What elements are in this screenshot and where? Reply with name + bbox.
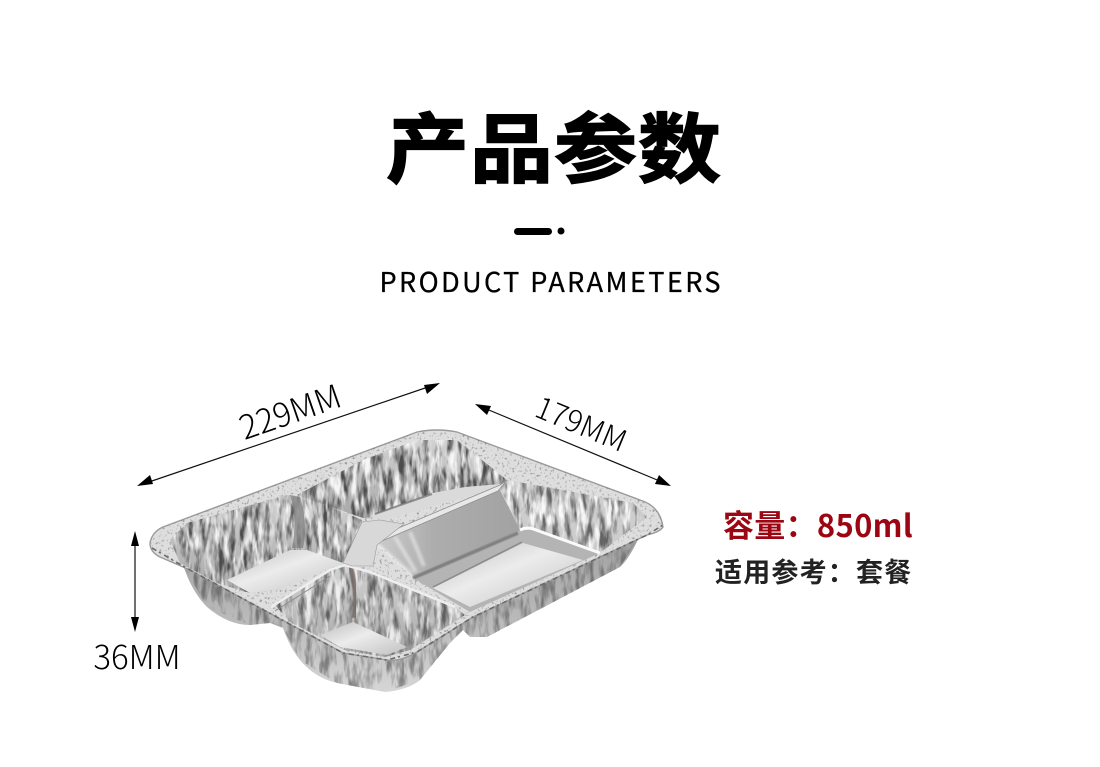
use spec: 适用参考：套餐 <box>715 551 912 590</box>
tray body underside lobes <box>184 540 638 692</box>
compartment: front <box>271 563 468 659</box>
dimension label: 36MM: 36MM <box>93 631 181 679</box>
decorative title mark <box>514 228 564 235</box>
compartment: right long <box>375 478 650 612</box>
compartment: left <box>168 493 364 595</box>
icon: foil tray product photo <box>148 428 666 695</box>
dimension label: 179MM: 179MM <box>529 383 634 461</box>
dimension arrow: 36MM height <box>131 531 139 632</box>
title: 产品参数 <box>386 88 722 199</box>
dimension arrow: 229MM width <box>137 383 440 486</box>
subtitle: PRODUCT PARAMETERS <box>380 261 720 300</box>
tray centre junction <box>343 520 404 566</box>
compartment: top back <box>295 438 509 520</box>
tray front rim edge <box>152 525 663 660</box>
dimension arrow: 179MM depth <box>475 404 671 486</box>
tray rim <box>150 430 663 660</box>
capacity spec: 容量：850ml <box>723 501 913 546</box>
dimension label: 229MM: 229MM <box>232 370 347 450</box>
